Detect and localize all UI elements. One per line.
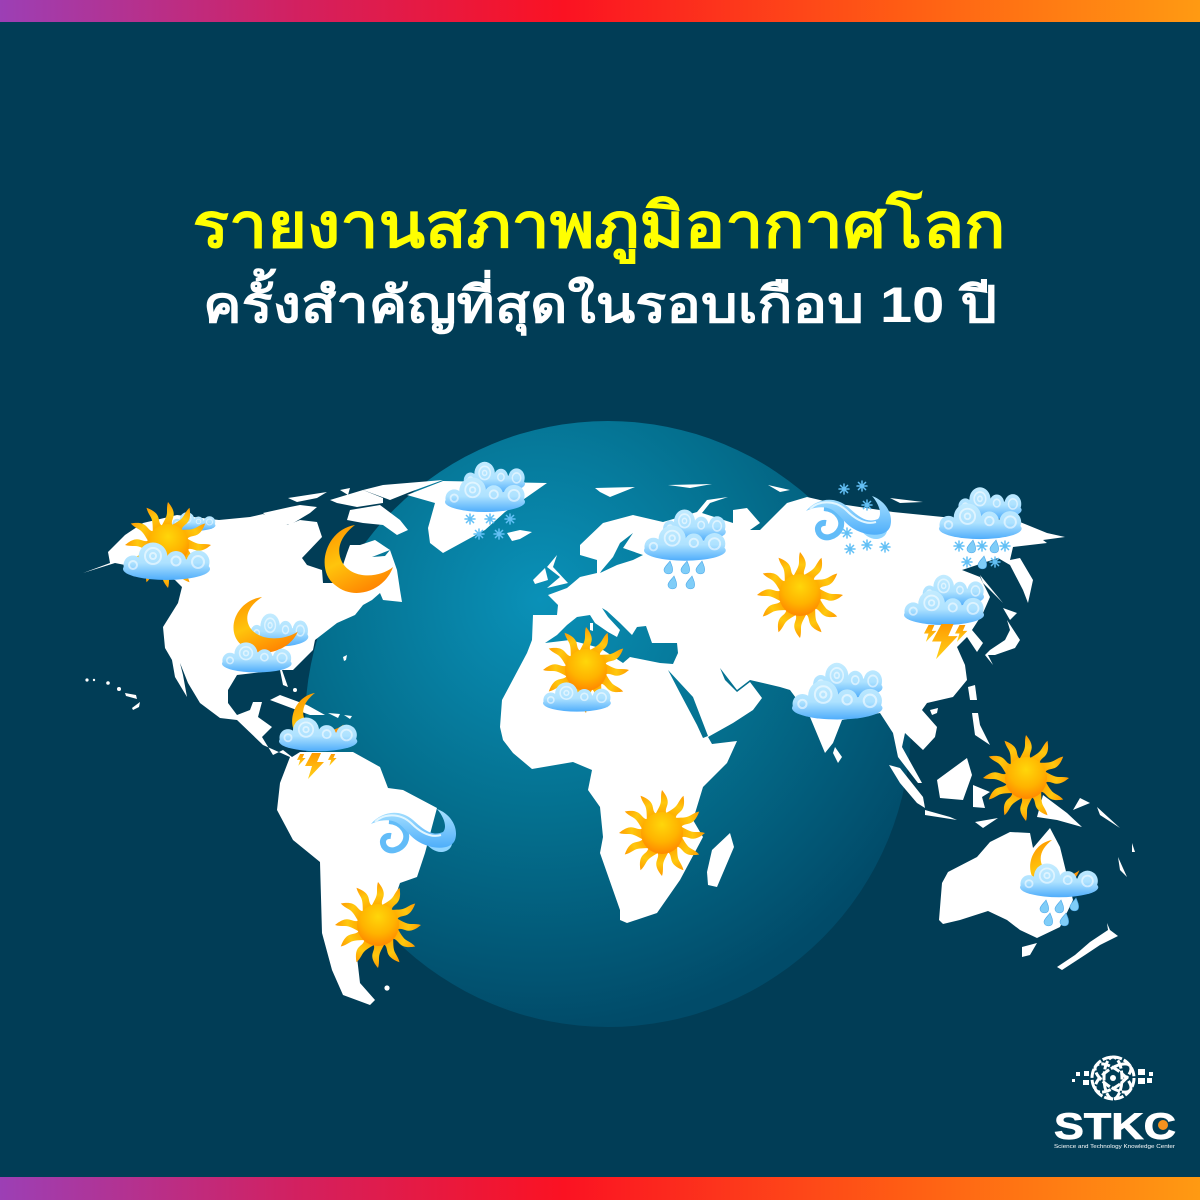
logo wordmark: STKC	[1054, 1106, 1176, 1147]
icon: cloud, India	[792, 663, 882, 720]
icon: sun with clouds, Alaska	[123, 502, 216, 588]
logo subtitle: Science and Technology Knowledge Center	[1054, 1144, 1175, 1150]
Australia	[939, 828, 1073, 938]
Southeast Asia islands	[833, 685, 1082, 828]
logo dots	[1072, 1069, 1153, 1085]
Tasmania	[1022, 943, 1037, 957]
title	[192, 189, 1006, 336]
logo orange dot	[1158, 1120, 1168, 1130]
Pacific island slivers	[1073, 798, 1135, 877]
icon: wind, Brazil	[371, 809, 456, 852]
icon: sun, South America	[335, 882, 421, 968]
icon: cloud and snow, Greenland	[445, 462, 525, 539]
Japan and Sakhalin	[985, 620, 1020, 665]
Iceland	[507, 530, 532, 541]
Corsica	[590, 623, 593, 631]
icon: storm cloud, China	[904, 575, 984, 659]
icon: moon, cloud and lightning, Caribbean	[279, 693, 357, 779]
logo: STKC	[1054, 1057, 1176, 1150]
globe circle	[305, 421, 911, 1027]
Arctic islands of Russia	[595, 487, 635, 497]
UK and Ireland	[547, 555, 568, 588]
top gradient bar	[0, 0, 1200, 22]
icon: sun, Africa	[619, 790, 705, 876]
icon: sun, Indonesia	[983, 735, 1069, 821]
icon: crescent moon, Canada	[325, 525, 393, 593]
Madagascar	[707, 833, 734, 887]
Greenland	[407, 481, 547, 553]
title: ครั้งสำคัญที่สุดในรอบเกือบ 10 ปี	[203, 268, 997, 336]
logo atom mark	[1091, 1057, 1135, 1099]
icon: sun with cloud, Mediterranean	[543, 627, 629, 713]
New Zealand	[1057, 923, 1118, 970]
North America	[83, 514, 437, 1005]
icon: moon with clouds, USA	[222, 597, 308, 672]
icon: rain cloud, Russia	[644, 509, 726, 589]
icon: sun, Central Asia	[757, 552, 843, 638]
bottom gradient bar	[0, 1177, 1200, 1200]
Eurasia and Africa with Mediterranean, Red Sea and Baltic cut out	[500, 497, 1065, 923]
icon: moon, cloud and rain, Australia	[1020, 840, 1098, 926]
Canadian Arctic islands	[263, 480, 443, 535]
title: รายงานสภาพภูมิอากาศโลก	[192, 189, 1006, 264]
icon: wind and snow, Siberia	[806, 481, 891, 554]
Caribbean and Pacific islands	[85, 655, 390, 991]
icon: cloud with snow and rain, East Siberia	[939, 487, 1022, 569]
world map	[83, 480, 1135, 1005]
